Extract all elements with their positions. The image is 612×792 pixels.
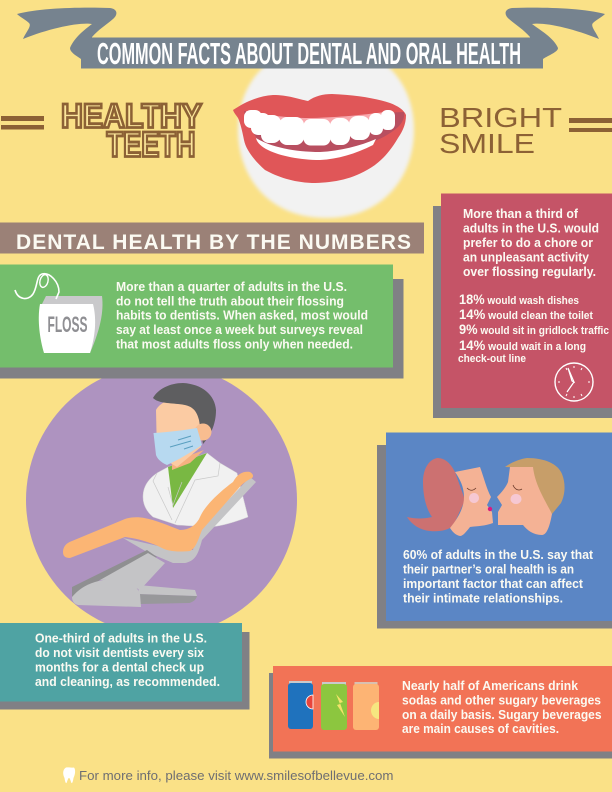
lower teeth	[256, 138, 376, 160]
statistics list: check-out line	[458, 353, 526, 365]
intro text: adults in the U.S. would	[463, 220, 599, 236]
panel: floss	[0, 264, 404, 378]
intro text	[463, 206, 599, 279]
heading background	[0, 222, 424, 254]
dentist coat	[143, 453, 248, 527]
chair arm shadow	[72, 550, 157, 597]
visits text: do not visit dentists every six	[35, 646, 204, 660]
heading text: DENTAL HEALTH BY THE NUMBERS	[16, 231, 411, 254]
ribbon left tail	[17, 8, 116, 60]
man hair	[505, 458, 565, 514]
partner text: their partner’s oral health is an	[403, 562, 574, 576]
mask creases	[170, 436, 193, 449]
beverages text: sodas and other sugary beverages	[402, 694, 601, 708]
icon: smile	[233, 94, 406, 183]
icon: cans	[288, 681, 379, 730]
dentist ear	[194, 424, 212, 440]
lips	[488, 507, 492, 511]
panel: flossing chores	[433, 194, 612, 418]
title banner	[17, 8, 605, 71]
right double bar	[569, 118, 612, 132]
partner text: important factor that can affect	[403, 577, 584, 591]
dentist face	[156, 398, 201, 467]
icon: tooth	[63, 767, 75, 783]
upper teeth	[244, 110, 395, 146]
mouth interior	[244, 111, 404, 159]
intro text: an unpleasant activity	[463, 250, 590, 264]
intro text: prefer to do a chore or	[463, 235, 593, 250]
partner text	[403, 548, 594, 606]
floss text: that most adults floss only when needed.	[116, 337, 353, 351]
panel shadow	[269, 673, 612, 758]
lips	[233, 94, 406, 183]
footer	[63, 767, 393, 783]
beverages text: are main causes of cavities.	[402, 722, 559, 736]
panel background	[0, 623, 242, 702]
statistics list: 14% would clean the toilet	[459, 306, 593, 322]
partner text: 60% of adults in the U.S. say that	[403, 548, 594, 562]
panel: sugary beverages	[269, 666, 612, 758]
icon: kissing couple	[407, 458, 565, 536]
thread	[15, 274, 59, 299]
statistics list: 18% would wash dishes	[459, 291, 579, 307]
man face	[497, 467, 552, 535]
intro text: More than a third of	[463, 206, 579, 221]
floss text: habits to dentists. When asked, most would	[116, 309, 368, 323]
neck	[172, 450, 204, 470]
healthy word: HEALTHY	[61, 98, 202, 136]
panel background	[0, 264, 393, 368]
panel shadow	[433, 206, 612, 418]
panel background	[386, 432, 612, 621]
ribbon right tail	[506, 8, 605, 60]
panel: dental visits	[0, 623, 250, 710]
chair foot light	[138, 585, 197, 596]
chair foot dark	[139, 594, 197, 604]
teeth word: TEETH	[106, 126, 196, 164]
partner text: their intimate relationships.	[403, 592, 563, 606]
visits text	[35, 632, 220, 689]
floss text	[116, 280, 368, 351]
panel background	[273, 666, 612, 752]
ribbon centre band	[81, 38, 543, 68]
heading: bright smile	[439, 102, 612, 159]
purple circle	[26, 364, 297, 636]
chair pad	[63, 472, 253, 558]
floss text: do not tell the truth about their flossing	[116, 294, 344, 308]
beverages text: Nearly half of Americans drink	[402, 679, 578, 693]
section heading bar	[0, 222, 424, 254]
woman face	[450, 467, 493, 536]
panel shadow	[0, 279, 404, 378]
floss text: More than a quarter of adults in the U.S.	[116, 280, 347, 294]
statistics list: 14% would wait in a long	[459, 337, 586, 353]
collar lines	[153, 463, 220, 523]
box side	[42, 296, 102, 353]
left double bar	[1, 116, 44, 130]
chair base	[72, 579, 141, 607]
green can	[321, 682, 347, 730]
panel background	[441, 194, 612, 408]
panel shadow	[0, 632, 250, 710]
bright word: BRIGHT	[439, 102, 562, 133]
cheeks	[469, 493, 522, 504]
visits text: One-third of adults in the U.S.	[35, 632, 207, 646]
woman hair	[407, 458, 465, 531]
heading: healthy teeth	[1, 98, 202, 164]
visits text: months for a dental check up	[35, 660, 204, 674]
dentist mask	[154, 428, 202, 465]
beverages text: on a daily basis. Sugary beverages	[402, 708, 602, 722]
intro text: over flossing regularly.	[463, 264, 596, 279]
floss text: say at least once a week but surveys reveal	[116, 323, 363, 337]
thread loop	[38, 274, 50, 288]
blue can	[288, 681, 313, 729]
icon: floss box	[15, 274, 102, 353]
floss label: FLOSS	[48, 312, 88, 337]
gums	[246, 111, 392, 126]
beverages text	[402, 679, 602, 736]
icon: clock	[555, 363, 593, 401]
panel: partner oral health	[377, 432, 612, 628]
dentist shirt	[168, 453, 207, 508]
panel shadow	[377, 445, 612, 628]
eyes	[467, 485, 522, 490]
dentist hair	[153, 383, 216, 444]
glow behind the smile	[238, 45, 414, 218]
footer text: For more info, please visit www.smilesofbellevue.com	[79, 768, 394, 783]
chair back support	[123, 477, 256, 563]
box front	[39, 304, 95, 353]
smile word: SMILE	[439, 128, 535, 159]
orange can	[353, 682, 379, 730]
statistics list	[458, 291, 609, 365]
chair arm	[100, 553, 165, 590]
illustration: dentist in circle	[26, 364, 297, 636]
visits text: and cleaning, as recommended.	[35, 675, 220, 689]
